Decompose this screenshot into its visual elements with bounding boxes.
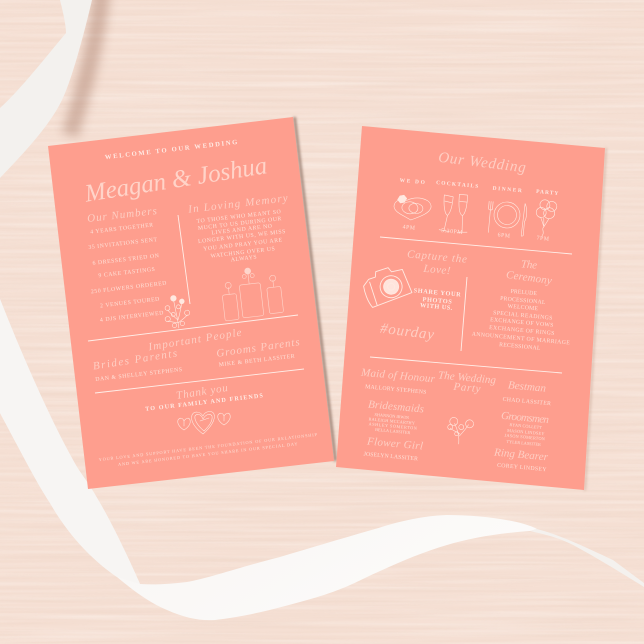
section heading: capture the love: Capture the [407,248,468,266]
list: ceremony order: RECESSIONAL [499,342,541,352]
text block: memorial: LONGER WITH US, WE MISS [198,229,286,245]
list: ceremony order: EXCHANGE OF RINGS [489,325,555,337]
icon: balloons [534,199,557,237]
section heading: bridesmaids: Bridesmaids [368,398,424,416]
divider: vertical [461,277,467,351]
text block: memorial: YOU AND PRAY YOU ARE [203,237,283,253]
divider: horizontal [370,357,562,373]
section heading: the ceremony: Ceremony [505,269,553,287]
icon: candles with flowers [220,265,284,321]
divider: horizontal [380,237,572,254]
list: bridesmaids: RALEIGH MCCARTHY [368,416,416,426]
ribbon shadow: top left [70,0,102,135]
text: bestman name: CHAD LASSITER [502,397,552,407]
list: ceremony order: EXCHANGE OF VOWS [490,317,554,329]
list: ceremony order: ANNOUNCEMENT OF MARRIAGE [471,332,571,346]
text block: memorial: ALWAYS [230,254,258,264]
list: groomsmen [504,422,546,447]
labels: schedule: COCKTAILS [436,180,480,190]
divider: horizontal [95,369,304,393]
section heading: the ceremony: The [520,258,538,272]
list: ceremony order: PRELUDE [510,289,538,297]
list: bridesmaids: BELLA LASSITER [375,427,411,435]
text block: share your photos: PHOTOS [422,296,454,306]
text: brides parents names: DAN & SHELLEY STEPHENS [95,367,183,383]
section heading: capture the love [407,248,468,277]
section heading: thank you: Thank you [175,382,229,402]
icon: plate and cutlery [486,200,527,236]
list: groomsmen: TYLER LASSITER [506,439,542,447]
labels: schedule: WE DO [399,178,427,186]
text: grooms parents names: MIKE & BETH LASSITER [218,354,296,368]
ribbon: top left [0,0,92,178]
card shadows [293,117,607,491]
list: our numbers [88,222,167,324]
list: bridesmaids [368,412,418,435]
text: hashtag: #ourday [379,321,435,343]
icon: champagne glasses [439,193,470,233]
text block: memorial: WATCHING OVER US [210,246,276,260]
text block: share your photos [413,287,463,312]
list: bridesmaids: ASHLEY SOMERTON [368,421,418,431]
text block: share your photos: SHARE YOUR [413,287,463,299]
list: our numbers: 250 FLOWERS ORDERED [91,281,167,295]
list: ceremony order: PROCESSIONAL [500,296,546,306]
section heading: maid of honour: Maid of Honour [360,367,436,385]
section heading: the ceremony [505,258,553,287]
list: our numbers: 2 VENUES TOURED [100,297,160,309]
section heading: the wedding party: The Wedding [438,369,497,387]
text: to our family and friends: TO OUR FAMILY AND FRIENDS [145,393,265,413]
section heading: ring bearer: Ring Bearer [493,446,549,463]
text: ring bearer name: COREY LINDSEY [497,463,547,473]
list: ceremony order: SPECIAL READINGS [493,310,553,322]
section heading: in loving memory: In Loving Memory [187,192,288,216]
icon: rings [393,194,432,222]
section heading: grooms parents: Grooms Parents [216,336,300,360]
panel: our wedding card [336,126,605,490]
heading: couple names: Meagan & Joshua [82,152,269,208]
list: groomsmen: MASON LINDSEY [507,428,545,436]
labels: times [402,224,550,243]
text: flower girl name: JOSELYN LASSITER [363,452,419,462]
heading: our wedding: Our Wedding [437,150,527,176]
list: groomsmen: RYAN COLLETT [509,422,543,430]
icon: hearts [178,412,230,434]
section heading: our numbers: Our Numbers [87,205,157,225]
list: ceremony order [471,289,571,352]
text block: closing message: AND WE ARE HONORED TO HAVE YOU SHARE IN OUR SPECIAL DAY [118,441,298,467]
labels: schedule: DINNER [492,186,524,194]
section heading: capture the love: Love! [422,263,451,277]
text block: share your photos: WITH US. [420,302,454,312]
labels: schedule [399,178,560,197]
text block: memorial [196,209,286,264]
section heading: the wedding party [438,369,497,395]
text block: memorial: TO THOSE WHO MEANT SO [196,209,282,225]
list: our numbers: 9 CAKE TASTINGS [98,267,156,279]
section heading: brides parents: Brides Parents [92,347,178,373]
icon: floral bouquet [163,294,191,329]
list: our numbers: 4 DJS INTERVIEWED [100,310,164,324]
section heading: the wedding party: Party [452,381,481,395]
labels: times: 6PM [497,232,511,240]
list: our numbers: 35 INVITATIONS SENT [88,237,158,251]
text: maid of honour name: MALLORY STEPHENS [365,384,427,396]
section heading: flower girl: Flower Girl [366,435,423,453]
list: ceremony order: WELCOME [507,304,539,312]
ribbon: bottom sweep [0,299,644,620]
section heading: important people: Important People [147,327,242,353]
text block: closing message: YOUR LOVE AND SUPPORT HAVE BEEN THE FOUNDATION OF OUR RELATIONSHIP [98,432,318,462]
section heading: groomsmen: Groomsmen [501,410,550,426]
list: groomsmen: JASON SOMERTON [504,433,546,441]
list: our numbers: 6 DRESSES TRIED ON [92,253,160,267]
labels: times: 5:30PM [441,228,463,236]
labels: times: 4PM [402,224,416,232]
section heading: bestman: Bestman [508,379,547,395]
divider: horizontal [88,315,298,341]
labels: schedule: PARTY [536,189,560,197]
list: bridesmaids: SHANNON IRWIN [374,412,410,420]
divider: vertical [178,215,190,304]
labels: times: 7PM [536,235,550,243]
list: our numbers: 4 YEARS TOGETHER [90,222,154,236]
icon: flower sprig [446,417,474,445]
text block: memorial: LIVES AND ARE NO [211,223,273,237]
heading: welcome: WELCOME TO OUR WEDDING [105,139,239,161]
text block: memorial: MUCH TO US DURING OUR [198,216,282,232]
icon: camera [360,263,413,308]
panel: welcome card [48,117,334,489]
